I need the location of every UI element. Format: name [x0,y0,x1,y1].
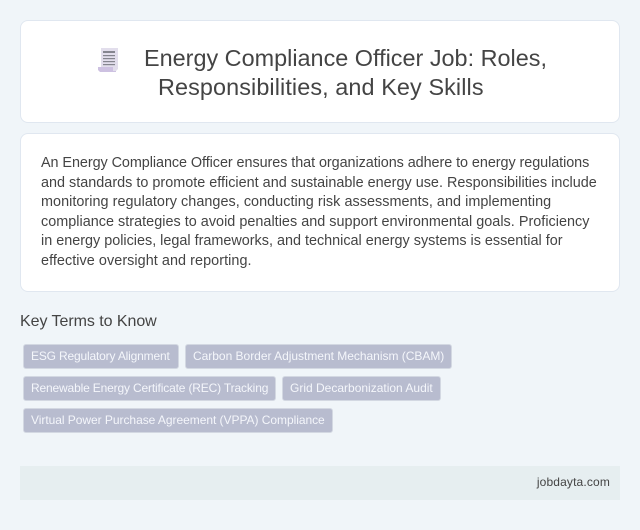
header panel [20,20,620,123]
description text: monitoring regulatory changes, conducting risk assessments, and implementing [41,194,551,210]
tag: Virtual Power Purchase Agreement (VPPA) Compliance [31,413,325,427]
tag [23,408,333,433]
description text: An Energy Compliance Officer ensures that organizations adhere to energy regulations [41,155,589,171]
tag [185,344,452,369]
tag: Grid Decarbonization Audit [290,381,433,395]
title: Energy Compliance Officer Job: Roles, [144,45,547,71]
tag: Renewable Energy Certificate (REC) Tracking [31,381,268,395]
description text: compliance strategies to avoid penalties and support environmental goals. Proficiency [41,214,589,230]
icon: document [98,48,118,72]
tag: ESG Regulatory Alignment [31,349,170,363]
tag: Carbon Border Adjustment Mechanism (CBAM) [193,349,444,363]
title [144,45,547,100]
description panel [20,133,620,292]
tag [23,376,276,401]
footer bar [20,466,620,500]
key terms tags [23,344,452,433]
description text: in energy policies, legal frameworks, and technical energy systems is essential for [41,233,562,249]
title: Responsibilities, and Key Skills [158,74,484,100]
description text: effective oversight and reporting. [41,252,252,268]
tag [23,344,179,369]
heading: key terms: Key Terms to Know [20,313,157,330]
description text [41,155,597,268]
footer source text: jobdayta.com [537,475,610,489]
tag [282,376,441,401]
description text: and standards to promote efficient and sustainable energy use. Responsibilities include [41,174,597,190]
